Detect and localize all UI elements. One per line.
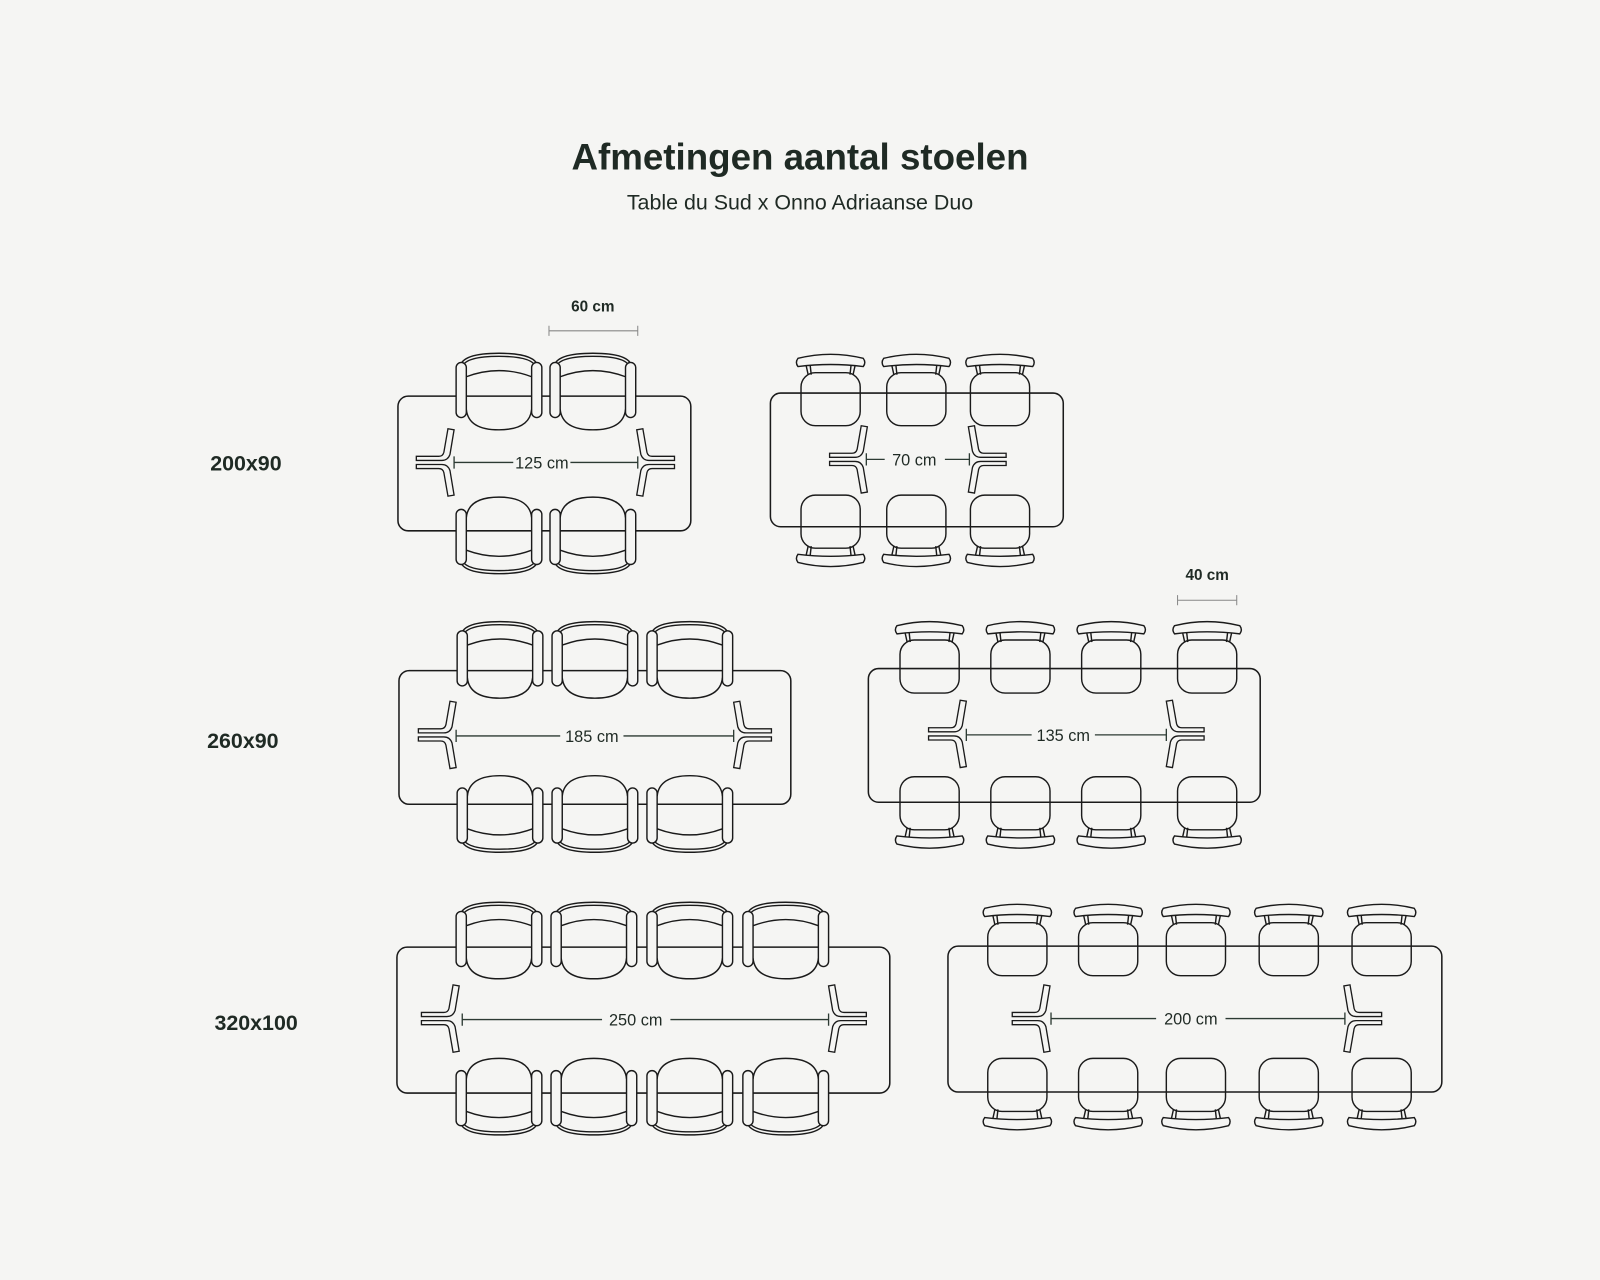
dimension: 40 cm: 40 cm (1185, 567, 1229, 584)
dimension: 60 cm: 60 cm (571, 298, 615, 315)
table 260x90 armchairs (399, 622, 791, 852)
table 320x100 side chairs (948, 904, 1442, 1130)
table 320x100 side chairs: 200 cm (1164, 1011, 1218, 1029)
table 260x90 side chairs (868, 622, 1260, 848)
table 200x90 side chairs (770, 354, 1063, 567)
title: Afmetingen aantal stoelen (571, 137, 1029, 178)
table 260x90 side chairs: 135 cm (1037, 727, 1090, 745)
table 260x90 armchairs: 185 cm (565, 728, 619, 746)
table 320x100 armchairs: 250 cm (609, 1012, 662, 1030)
subtitle: Table du Sud x Onno Adriaanse Duo (627, 190, 973, 214)
table 200x90 side chairs: 70 cm (892, 452, 936, 470)
table 200x90 armchairs: 125 cm (515, 455, 569, 473)
row label: 200x90: 200x90 (210, 452, 282, 476)
table 320x100 armchairs (397, 902, 890, 1135)
dimension: 60 cm (549, 298, 638, 336)
row label: 260x90: 260x90 (207, 729, 279, 753)
row label: 320x100: 320x100 (214, 1011, 298, 1035)
table 200x90 armchairs (398, 353, 691, 574)
dimension: 40 cm (1178, 567, 1237, 605)
